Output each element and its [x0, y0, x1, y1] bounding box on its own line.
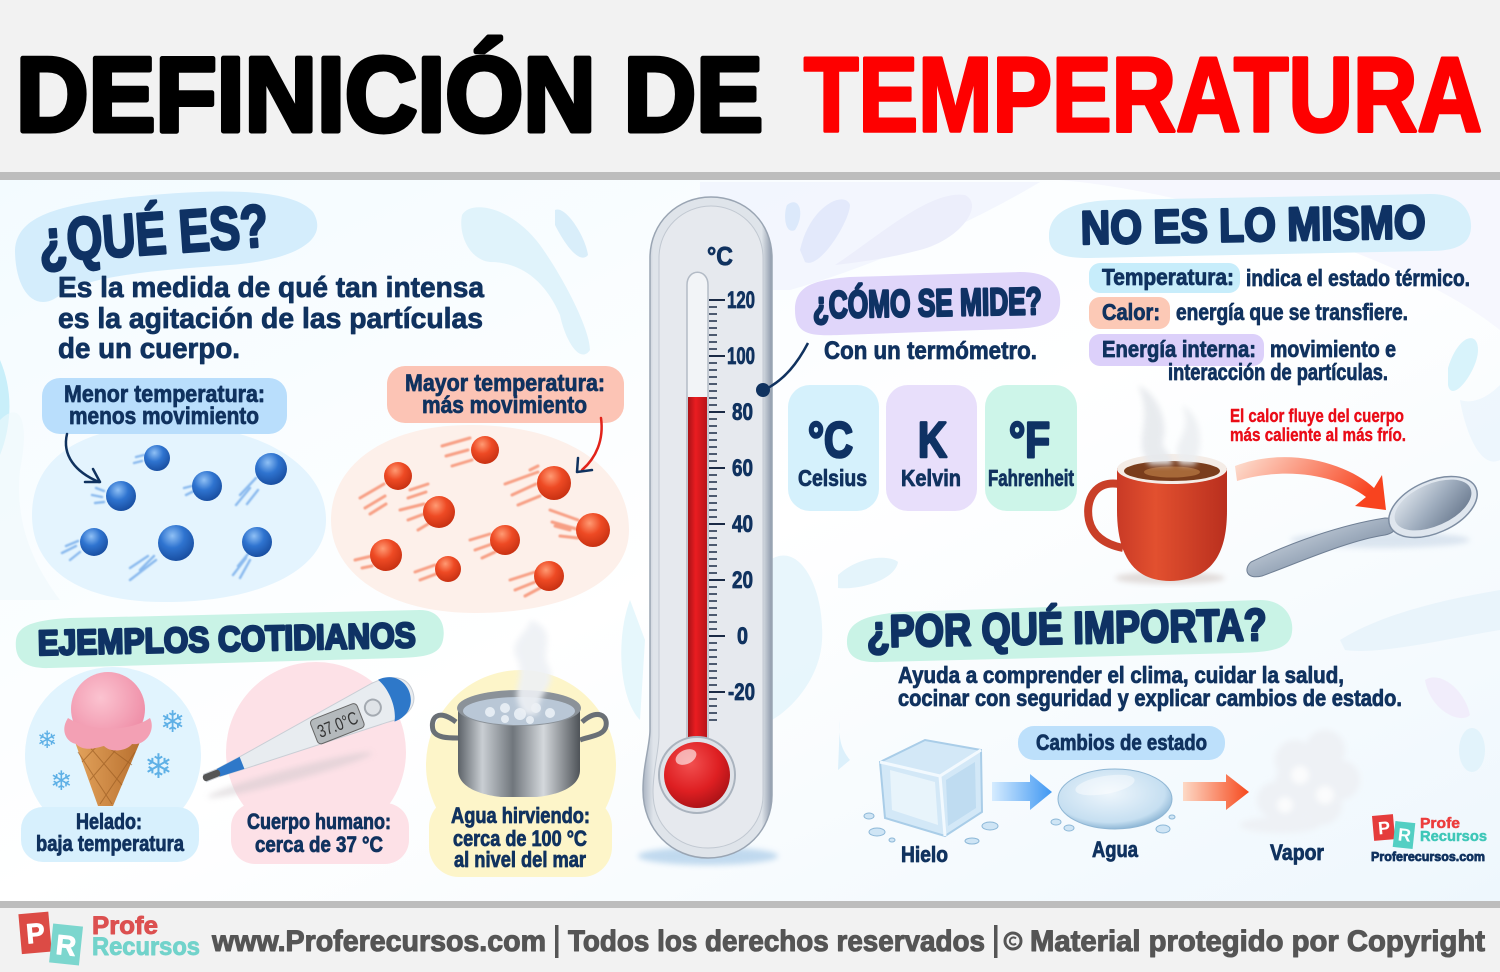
scale numbers: 100 [727, 343, 755, 370]
row: energía interna: interacción de partículas. [1168, 359, 1388, 385]
arrow: agua a vapor [1183, 774, 1249, 810]
header band [0, 0, 1500, 180]
scale ticks [709, 307, 717, 720]
bulb [659, 737, 735, 813]
text: el calor fluye: El calor fluye del cuerpo [1230, 406, 1404, 426]
scale numbers: 80 [732, 399, 753, 426]
panel: por qué importa [847, 599, 1487, 867]
row: calor: Calor: [1102, 299, 1160, 325]
card: kelvin [886, 385, 977, 511]
row: temperatura [1089, 263, 1470, 293]
particles hot [331, 425, 629, 613]
card: celsius [788, 385, 879, 511]
example: olla hirviendo [426, 620, 616, 860]
caption: helado [21, 807, 199, 862]
icon: nube de vapor [1240, 730, 1360, 833]
definition text [58, 272, 485, 365]
unit label: °C [707, 241, 733, 271]
heading: qué es: ¿QUÉ ES? [36, 192, 270, 275]
scale numbers: 20 [732, 567, 753, 594]
logo small: R [1397, 824, 1412, 846]
card: fahrenheit: °F [1009, 412, 1050, 468]
label: mayor temperatura [387, 366, 624, 423]
heading: por qué importa: ¿POR QUÉ IMPORTA? [866, 599, 1267, 657]
caption: helado: Helado: [76, 809, 142, 834]
mercury column [688, 397, 707, 747]
caption: cuerpo humano: Cuerpo humano: [247, 809, 391, 834]
footer [0, 901, 1500, 972]
scale numbers: 60 [732, 455, 753, 482]
main background [0, 180, 1500, 901]
definition text: Es la medida de qué tan intensa [58, 272, 485, 304]
arrow: hielo a agua [992, 774, 1052, 810]
text: con un termómetro: Con un termómetro. [824, 337, 1037, 365]
footer text: www.Proferecursos.com [211, 925, 546, 958]
scale numbers: 0 [737, 623, 748, 650]
footer logo: R [54, 929, 78, 962]
panel: ejemplos cotidianos [16, 610, 616, 877]
icon: cubo de hielo [864, 740, 998, 844]
text: importancia: cocinar con seguridad y explicar cambios de estado. [898, 685, 1402, 711]
text: el calor fluye [1230, 406, 1406, 445]
label: agua: Agua [1092, 837, 1139, 862]
label: menor temperatura: Menor temperatura: [64, 381, 265, 408]
example: termómetro digital: 37.0°C [314, 708, 361, 742]
row: energía interna: Energía interna: [1102, 336, 1256, 362]
icon: gota de agua [1051, 769, 1175, 833]
example: termómetro digital [193, 662, 421, 842]
row: calor [1089, 297, 1408, 329]
label: mayor temperatura: Mayor temperatura: [405, 370, 605, 397]
example: helado [25, 667, 201, 843]
label: menor temperatura [42, 378, 287, 434]
heading: no es lo mismo: NO ES LO MISMO [1080, 195, 1426, 254]
card: fahrenheit [985, 385, 1077, 511]
caption: agua hirviendo: cerca de 100 °C [453, 826, 587, 851]
scale numbers: 40 [732, 511, 753, 538]
text: importancia [898, 662, 1402, 711]
heading: cómo se mide: ¿CÓMO SE MIDE? [812, 279, 1042, 327]
caption: helado: baja temperatura [36, 831, 185, 856]
row: temperatura: Temperatura: [1102, 264, 1234, 290]
thermometer body [643, 197, 772, 858]
example: helado: ❄ [160, 705, 185, 740]
definition text: es la agitación de las partículas [58, 303, 483, 335]
illustration: cuchara [1247, 464, 1487, 577]
footer logo [18, 912, 200, 965]
arrow: to hot particle [577, 418, 602, 472]
text: el calor fluye: más caliente al más frío. [1230, 425, 1406, 445]
label: hielo: Hielo [901, 842, 948, 867]
heading: cómo se mide [795, 272, 1060, 335]
label: vapor: Vapor [1270, 840, 1324, 865]
logo small: P [1377, 818, 1391, 838]
callout connector [756, 343, 808, 397]
caption: agua hirviendo: al nivel del mar [454, 847, 586, 872]
row: energía interna [1089, 334, 1396, 385]
label: cambios de estado [1018, 726, 1225, 760]
footer logo: Profe [92, 912, 158, 940]
logo small [1371, 814, 1487, 864]
caption: agua hirviendo: Agua hirviendo: [451, 803, 590, 828]
text: importancia: Ayuda a comprender el clima, cuidar la salud, [898, 662, 1344, 688]
arrow: to cold particle [66, 434, 100, 482]
arrow: flujo de calor [1235, 457, 1386, 510]
scale numbers [727, 287, 755, 706]
caption: agua hirviendo [429, 797, 612, 877]
panel: qué es [15, 191, 629, 613]
glass tube [687, 272, 708, 745]
footer text [211, 925, 1485, 958]
title: DEFINICIÓN DE [16, 36, 763, 154]
footer text: Todos los derechos reservados [568, 925, 985, 958]
row: energía interna: movimiento e [1270, 336, 1396, 362]
example: helado: ❄ [37, 726, 57, 754]
logo small: Recursos [1420, 828, 1487, 845]
label: mayor temperatura: más movimiento [422, 392, 587, 419]
footer text: Material protegido por Copyright [1030, 925, 1485, 958]
thermometer face [653, 206, 763, 848]
caption: cuerpo humano: cerca de 37 °C [255, 832, 383, 857]
caption: cuerpo humano [231, 803, 409, 864]
example: helado: ❄ [144, 747, 172, 787]
footer logo: P [25, 917, 46, 950]
footer logo: Recursos [92, 933, 200, 961]
card: celsius: Celsius [798, 465, 867, 491]
definition text: de un cuerpo. [58, 333, 240, 365]
card: kelvin: Kelvin [901, 465, 961, 491]
scale numbers: 120 [727, 287, 755, 314]
label: menor temperatura: menos movimiento [69, 403, 259, 430]
thermometer [638, 197, 778, 865]
title [16, 36, 1482, 154]
illustration: taza con vapor [1088, 385, 1227, 584]
card: kelvin: K [918, 412, 947, 468]
scale numbers: -20 [728, 679, 755, 706]
heading: ejemplos: EJEMPLOS COTIDIANOS [37, 616, 416, 663]
logo small: Proferecursos.com [1371, 849, 1485, 864]
card: fahrenheit: Fahrenheit [988, 465, 1074, 491]
heading: qué es [15, 191, 317, 302]
particles cold [32, 425, 326, 602]
panel: no es lo mismo [1049, 194, 1487, 584]
panel: cómo se mide [788, 272, 1077, 511]
row: calor: energía que se transfiere. [1176, 299, 1408, 325]
example: helado: ❄ [50, 766, 73, 797]
label: cambios de estado: Cambios de estado [1036, 730, 1207, 755]
logo small: Profe [1420, 815, 1460, 832]
card: celsius: °C [808, 412, 853, 468]
